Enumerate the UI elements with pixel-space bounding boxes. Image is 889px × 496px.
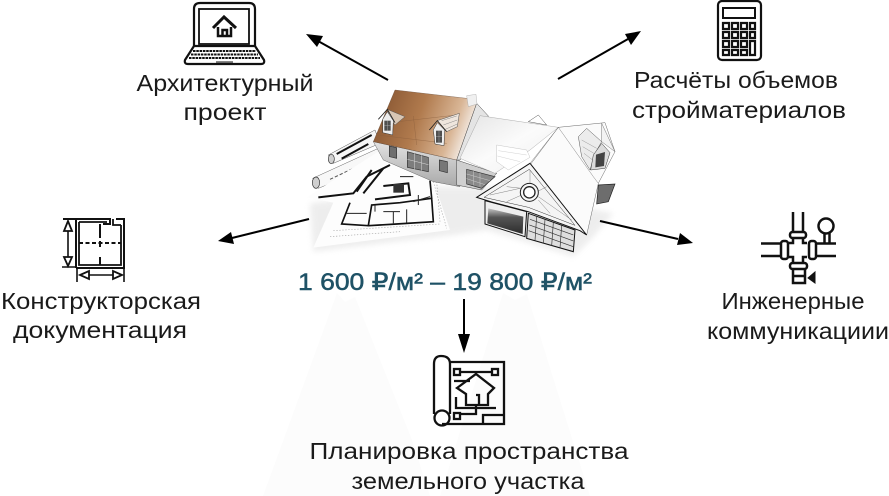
icon: construction drawing [62, 219, 124, 282]
house illustration [307, 90, 615, 257]
label: land planning: Планировка пространства [310, 438, 629, 464]
label: material calculations line 2: стройматериалов [632, 97, 846, 123]
gable [477, 163, 587, 235]
icon: site plan scroll [434, 356, 504, 426]
label: material calculations: Расчёты объемов [634, 67, 838, 93]
icon: calculator [718, 1, 761, 60]
blueprint rolls [312, 130, 385, 188]
label: engineering utilities: Инженерные [722, 288, 864, 314]
price range: 1 600 ₽/м² – 19 800 ₽/м² [298, 269, 592, 296]
right dormer [578, 128, 602, 170]
dormers [378, 109, 459, 146]
icon: laptop with house [185, 3, 264, 64]
middle garage block [457, 160, 497, 190]
brown roof [373, 90, 477, 160]
faint background mountains [263, 293, 590, 496]
label: engineering utilities line 2: коммуникациии [707, 318, 889, 344]
right wing roof [530, 123, 615, 235]
label: architectural project line 2: проект [184, 99, 267, 125]
label: architectural project: Архитектурный [136, 70, 314, 96]
ground shadow [310, 187, 613, 257]
label: design documentation line 2: документация [13, 317, 187, 343]
garage front [485, 201, 527, 237]
floor plan sheets [307, 152, 450, 248]
arrow: to engineering utilities [600, 221, 693, 245]
white roof centre [460, 116, 558, 173]
label: land planning line 2: земельного участка [352, 468, 585, 494]
left wing walls [373, 142, 460, 187]
icon: pipes and valve [761, 212, 836, 283]
arrow: to material calculations [558, 31, 641, 79]
arrow: to design documentation [218, 219, 309, 244]
arrow: to land planning [458, 299, 470, 353]
label: design documentation: Конструкторская [1, 288, 201, 314]
arrow: to architectural project [306, 34, 388, 80]
